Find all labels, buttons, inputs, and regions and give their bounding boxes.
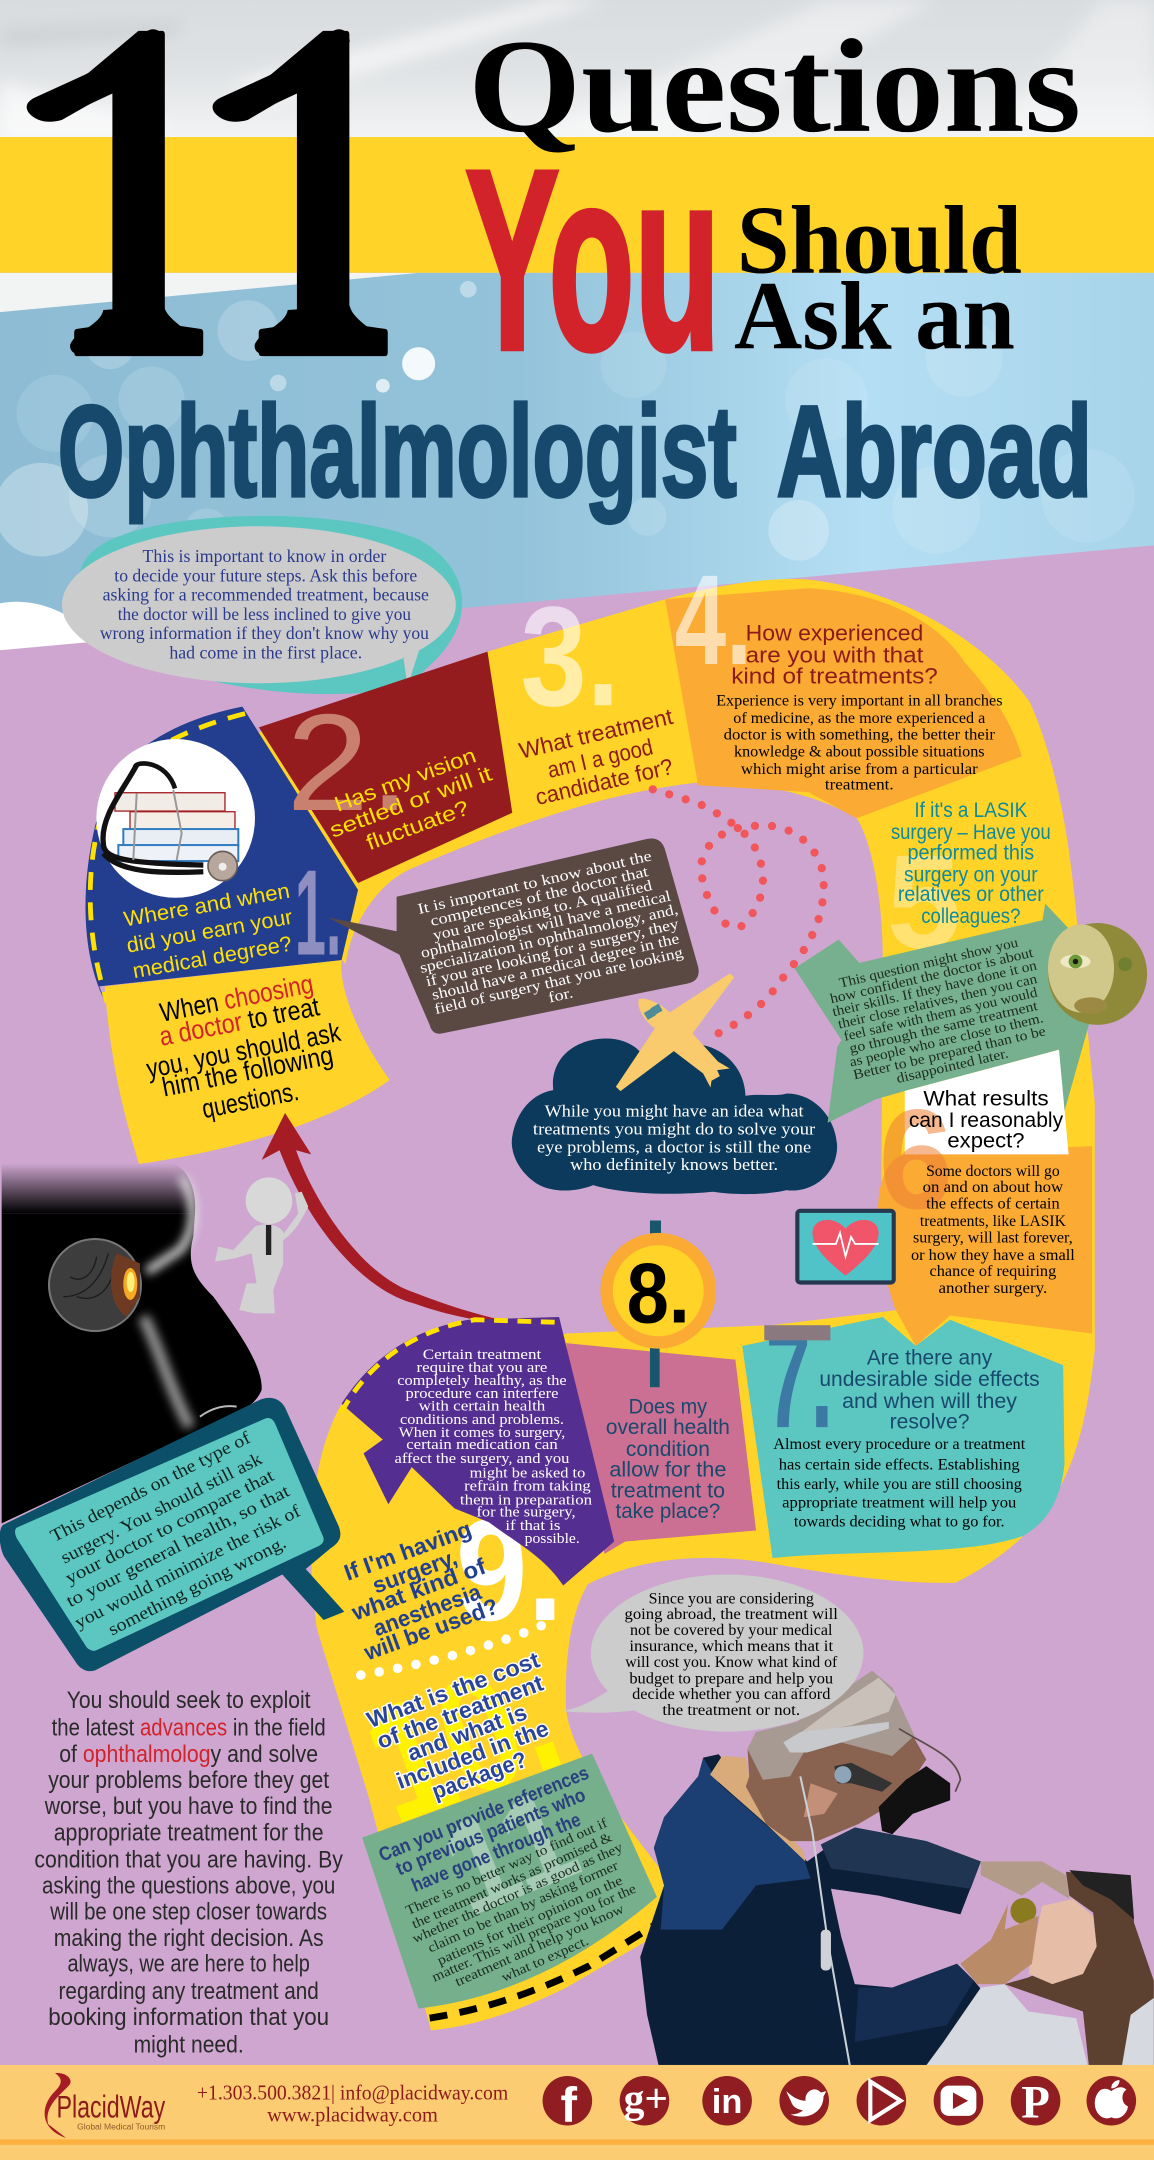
panel 4: experience: which might arise from a particular <box>741 761 978 778</box>
panel 5: lasik: If it's a LASIK <box>914 798 1027 822</box>
panel 11: references: 11 <box>424 1760 597 1944</box>
speech bubble: competences: for. <box>547 984 575 1007</box>
panel 4: experience: of medicine, as the more experienced a <box>733 710 985 727</box>
speech bubble: insurance: decide whether you can afford <box>632 1686 830 1703</box>
closing paragraph: appropriate treatment for the <box>54 1819 324 1846</box>
panel 5: lasik: Better to be prepared than to be <box>852 1023 1047 1083</box>
doctor oxygen tube <box>800 1776 851 2074</box>
panel 11: references: matter. This will prepare you for the <box>430 1881 638 1985</box>
closing paragraph: will be one step closer towards <box>49 1899 327 1926</box>
icon: pinterest: P <box>1021 2076 1050 2128</box>
speech bubble: top: the doctor will be less inclined to give you <box>118 604 411 624</box>
panel 9: anesthesia: 9. <box>456 1489 563 1651</box>
panel 6: results: 6 <box>879 1081 953 1239</box>
panel 7: side effects: this early, while you are still choosing <box>777 1476 1022 1493</box>
panel 6: results: chance of requiring <box>930 1263 1056 1280</box>
panel 9: anesthesia: refrain from taking <box>464 1479 591 1495</box>
photo: doctor examining patient <box>640 1671 1154 2074</box>
speech bubble: competences: specialization in ophthalmology, and, <box>418 901 680 977</box>
panel 3: good candidate: am I a good <box>545 733 655 783</box>
panel 4: experience: doctor is with something, the better their <box>724 727 996 744</box>
icon: airplane <box>616 973 734 1091</box>
panel 11: references: the treatment works as promised & <box>409 1829 615 1931</box>
panel 6: results <box>878 1050 1092 1346</box>
speech bubble: competences: It is important to know about the <box>416 847 654 918</box>
cloud with text: While you might have an idea what <box>545 1102 804 1121</box>
speech bubble: competences: ophthalmologist will have a medical <box>419 888 672 962</box>
speech bubble: insurance: not be covered by your medical <box>630 1622 833 1639</box>
panel 10: cost: of the treatment <box>373 1669 547 1754</box>
speech bubble: competences: you are speaking to. A qualified <box>431 877 654 944</box>
contact details <box>197 2082 508 2126</box>
panel 7: side effects: undesirable side effects <box>819 1367 1040 1391</box>
speech bubble: top: wrong information if they don't know why you <box>100 623 429 643</box>
closing paragraph: asking the questions above, you <box>42 1873 335 1900</box>
panel 6: results: another surgery. <box>938 1280 1047 1297</box>
speech bubble: top: This is important to know in order <box>143 546 386 566</box>
panel: intro when choosing a doctor: questions. <box>199 1076 301 1124</box>
speech bubble: left teal: your doctor to compare that <box>62 1465 277 1588</box>
panel 11: references <box>362 1754 684 2018</box>
panel 7: side effects: and when will they <box>842 1389 1017 1413</box>
panel 5: lasik: surgery – Have you <box>891 820 1051 844</box>
closing paragraph: condition that you are having. By <box>34 1846 343 1873</box>
panel 5: lasik: This question might show you <box>838 935 1020 992</box>
closing paragraph: the latest advances in the field <box>52 1715 326 1742</box>
panel 9: anesthesia: will be used? <box>360 1593 501 1666</box>
panel 10: cost: 10. <box>343 1621 582 1859</box>
panel 9: anesthesia: certain medication can <box>406 1437 558 1453</box>
speech bubble: left teal: to your general health, so that <box>63 1481 293 1611</box>
speech bubble: competences: field of surgery that you are looking <box>433 944 685 1018</box>
panel 6: results: expect? <box>947 1128 1025 1153</box>
panel 10: cost: and what is <box>404 1699 530 1766</box>
icon: 3D person thinking <box>215 1177 308 1313</box>
panel 9: anesthesia: surgery, <box>369 1544 460 1598</box>
panel 9: anesthesia: completely healthy, as the <box>397 1373 567 1389</box>
panel 8: overall health: condition <box>626 1437 710 1461</box>
cloud with text: who definitely knows better. <box>570 1155 778 1174</box>
title word You: You <box>465 117 720 404</box>
panel 9: anesthesia: require that you are <box>417 1360 547 1376</box>
icon: youtube <box>934 2076 983 2126</box>
panel 9: anesthesia: if that is <box>505 1518 561 1534</box>
icon: play store <box>857 2076 906 2126</box>
closing paragraph: You should seek to exploit <box>67 1687 311 1714</box>
panel 11: references: what to expect. <box>499 1933 591 1985</box>
icon: apple <box>1087 2076 1136 2126</box>
panel 7: side effects: towards deciding what to go for. <box>794 1513 1005 1530</box>
speech bubble: insurance: going abroad, the treatment will <box>625 1606 839 1623</box>
speech bubble: top: to decide your future steps. Ask this before <box>114 565 417 585</box>
badge: number 8 <box>600 1221 716 1387</box>
icon: facebook <box>543 2076 592 2132</box>
panel 5: lasik: go through the same treatment <box>848 998 1039 1057</box>
panel 11: references: patients for their opinion on the <box>435 1873 625 1968</box>
speech bubble: insurance: Since you are considering <box>649 1590 814 1607</box>
closing paragraph: always, we are here to help <box>67 1950 310 1977</box>
question 1: medical degree? <box>131 932 294 983</box>
panel 8: overall health: Does my <box>629 1394 707 1418</box>
speech bubble: left teal: you would minimize the risk of <box>71 1501 304 1632</box>
panel 8: overall health: allow for the <box>609 1458 726 1482</box>
closing paragraph: might need. <box>134 2032 244 2059</box>
logo: PlacidWay <box>45 2073 165 2138</box>
panel 5: lasik: colleagues? <box>921 904 1021 928</box>
patient <box>1005 1872 1154 2074</box>
panel 11: references: claim to be than by asking former <box>425 1857 621 1955</box>
panel 11: references: whether the doctor is as good as they <box>410 1839 625 1946</box>
icon: linkedin: in <box>712 2083 742 2121</box>
panel 11: references: There is no better way to find out if <box>403 1815 610 1918</box>
speech bubble: competences: if you are looking for a surgery, they <box>424 915 681 990</box>
title numeral 11 <box>27 0 403 458</box>
panel: intro when choosing a doctor: him the following <box>160 1040 336 1102</box>
panel 8: overall health: treatment to <box>611 1478 725 1502</box>
panel 9: anesthesia: procedure can interfere <box>406 1386 558 1402</box>
doctor hands <box>981 1862 1069 1899</box>
closing paragraph <box>34 1687 343 2059</box>
closing paragraph: making the right decision. As <box>54 1925 324 1952</box>
question 1 <box>122 879 294 983</box>
panel 4: experience: treatment. <box>825 776 894 793</box>
panel 9: anesthesia: possible. <box>525 1531 580 1547</box>
panel 6: results: treatments, like LASIK <box>920 1213 1066 1230</box>
closing paragraph: of ophthalmology and solve <box>59 1741 318 1768</box>
panel 7: side effects <box>742 1300 1064 1558</box>
panel 5: lasik: their skills. If they have done it on <box>831 958 1038 1020</box>
panel 9: anesthesia: for the surgery, <box>476 1505 576 1521</box>
icon: eye photo <box>1048 923 1147 1025</box>
title <box>27 0 1092 524</box>
badge: number 8: 8. <box>627 1246 690 1341</box>
speech bubble: top <box>62 516 462 694</box>
panel 9: anesthesia: When it comes to surgery, <box>399 1425 565 1441</box>
panel 9: anesthesia: with certain health <box>419 1399 546 1415</box>
logo: PlacidWay: PlacidWay <box>56 2088 165 2124</box>
dark face with eye <box>2 1163 262 1523</box>
panel 5: lasik: their close relatives, then you can <box>836 971 1039 1033</box>
panel 6: results: the effects of certain <box>926 1196 1060 1213</box>
panel 5: lasik: disappointed later. <box>895 1046 1010 1087</box>
panel 2: vision settled: fluctuate? <box>363 796 472 855</box>
panel 1: medical degree: 1. <box>295 845 342 981</box>
speech bubble: insurance: budget to prepare and help you <box>629 1670 833 1687</box>
panel 9: anesthesia: conditions and problems. <box>400 1412 564 1428</box>
contact details: +1.303.500.3821| info@placidway.com <box>197 2082 508 2104</box>
panel: intro when choosing a doctor: you, you should ask <box>144 1017 343 1084</box>
yellow road upper <box>253 579 1095 1584</box>
panel 5: lasik: relatives or other <box>898 882 1044 906</box>
panel 6: results: or how they have a small <box>911 1247 1075 1264</box>
panel 4: experience: Experience is very important in all branches <box>716 692 1003 709</box>
panel 6: results: Some doctors will go <box>926 1163 1060 1180</box>
panel 10: cost: included in the <box>393 1715 552 1794</box>
panel 4: experience: How experienced <box>746 621 923 646</box>
icon: books and stethoscope <box>96 739 255 898</box>
doctor head <box>746 1671 926 1841</box>
panel 8: overall health <box>566 1221 756 1554</box>
cloud with text: treatments you might do to solve your <box>533 1120 816 1139</box>
speech bubble: top: asking for a recommended treatment, because <box>103 585 429 605</box>
icon: google plus: g+ <box>624 2075 668 2121</box>
panel 1: medical degree <box>85 707 358 1006</box>
cloud with text: eye problems, a doctor is still the one <box>537 1137 811 1156</box>
closing paragraph: regarding any treatment and <box>59 1978 319 2005</box>
question 1: did you earn your <box>125 905 294 958</box>
panel 4: experience: kind of treatments? <box>731 663 938 688</box>
yellow road lower <box>311 1333 744 2031</box>
title word Questions: Questions <box>468 12 1081 160</box>
speech bubble: competences: competences of the doctor that <box>429 863 651 930</box>
panel: intro when choosing a doctor: a doctor to treat <box>157 991 322 1052</box>
panel 5: lasik: 5 <box>887 828 961 977</box>
panel 9: anesthesia: them in preparation <box>460 1492 592 1508</box>
icon: pinterest <box>1011 2076 1060 2128</box>
title word Ophthalmologist Abroad: Ophthalmologist <box>58 380 737 524</box>
panel: intro when choosing a doctor <box>105 960 390 1164</box>
panel 8: overall health: overall health <box>606 1415 730 1439</box>
panel: intro when choosing a doctor: When choosing <box>157 969 316 1028</box>
panel 9: anesthesia: what kind of <box>347 1553 490 1626</box>
panel 5: lasik: feel safe with them as you would <box>842 985 1039 1045</box>
speech bubble: competences: should have a medical degree in the <box>430 930 681 1004</box>
cloud with text <box>512 1038 837 1194</box>
panel 7: side effects: has certain side effects. Establishing <box>779 1456 1020 1473</box>
question 1: Where and when <box>122 879 292 931</box>
panel 9: anesthesia: might be asked to <box>470 1466 585 1482</box>
panel 3: good candidate: 3. <box>521 578 620 736</box>
panel 10: cost: What is the cost <box>363 1646 543 1733</box>
title words Should Ask an: Should <box>737 187 1022 295</box>
title: Ask an <box>734 263 1015 371</box>
panel 3: good candidate: candidate for? <box>533 753 675 810</box>
panel 9: anesthesia: affect the surgery, and you <box>395 1451 569 1467</box>
panel 5: lasik: surgery on your <box>904 863 1038 887</box>
panel 8: overall health: take place? <box>616 1499 720 1523</box>
closing paragraph: worse, but you have to find the <box>44 1793 333 1820</box>
red arrow <box>262 1113 530 1327</box>
panel 6: results: on and on about how <box>923 1179 1064 1196</box>
panel 2: vision settled: Has my vision <box>331 743 479 817</box>
panel 7: side effects: Are there any <box>867 1346 993 1370</box>
panel 11: references: Can you provide references <box>376 1763 592 1866</box>
panel 2: vision settled <box>259 652 512 883</box>
panel 9: anesthesia <box>340 1317 614 1675</box>
panel 10: cost: package? <box>428 1746 530 1804</box>
panel 5: lasik: performed this <box>908 841 1034 865</box>
logo: PlacidWay: Global Medical Tourism <box>77 2123 165 2132</box>
panel 5: lasik <box>795 798 1147 1123</box>
panel 7: side effects: resolve? <box>890 1410 970 1434</box>
speech bubble: competences <box>328 838 699 1034</box>
dotted flight path <box>653 789 824 1039</box>
panel 9: anesthesia: Certain treatment <box>423 1347 541 1363</box>
speech bubble: top: had come in the first place. <box>169 642 362 662</box>
footer <box>0 2065 1154 2160</box>
panel 6: results: can I reasonably <box>909 1108 1063 1132</box>
closing paragraph: booking information that you <box>48 2004 329 2031</box>
closing paragraph: your problems before they get <box>48 1767 329 1794</box>
panel 5: lasik: as people who are close to them. <box>848 1010 1045 1071</box>
panel 9: anesthesia: anesthesia <box>369 1578 485 1641</box>
panel 5: lasik: how confident the doctor is about <box>829 945 1035 1007</box>
icon: facebook: f <box>560 2076 577 2132</box>
panel 4: experience: 4. <box>675 549 752 692</box>
panel 2: vision settled: settled or will it <box>326 762 495 843</box>
panel 4: experience: are you with that <box>746 643 923 668</box>
speech bubble: insurance: the treatment or not. <box>662 1702 800 1719</box>
speech bubble: left teal: surgery. You should still ask <box>57 1448 265 1567</box>
panel 6: results: What results <box>923 1086 1049 1110</box>
speech bubble: insurance <box>562 1575 863 1732</box>
icon: eyeball <box>49 1239 141 1331</box>
speech bubble: left teal <box>0 1398 344 1671</box>
panel 11: references: to previous patients who <box>393 1785 589 1880</box>
panel 3: good candidate: What treatment <box>516 703 676 764</box>
panel 3: good candidate <box>516 578 676 810</box>
panel 7: side effects: Almost every procedure or a treatment <box>773 1436 1026 1453</box>
icon: linkedin <box>702 2076 752 2126</box>
doctor jacket <box>640 1754 983 2074</box>
panel 9: anesthesia: If I'm having <box>340 1515 475 1586</box>
panel 11: references: have gone through the <box>409 1810 584 1897</box>
panel 4: experience: knowledge & about possible situations <box>734 743 985 760</box>
speech bubble: left teal: something going wrong. <box>105 1532 289 1639</box>
panel 7: side effects: 7. <box>766 1300 833 1458</box>
speech bubble: insurance: insurance, which means that it <box>629 1638 834 1655</box>
panel 6: results: surgery, will last forever, <box>913 1230 1073 1247</box>
panel 7: side effects: appropriate treatment will help you <box>782 1495 1016 1512</box>
icon: twitter <box>779 2076 829 2126</box>
panel 11: references: treatment and help you know <box>453 1901 626 1989</box>
icon: heart monitor <box>797 1211 894 1282</box>
speech bubble: insurance: will cost you. Know what kind of <box>625 1654 838 1671</box>
speech bubble: left teal: This depends on the type of <box>47 1427 253 1546</box>
panel 4: experience <box>665 549 1022 818</box>
contact details: www.placidway.com <box>267 2104 438 2126</box>
panel number 2: 2. <box>286 686 410 840</box>
